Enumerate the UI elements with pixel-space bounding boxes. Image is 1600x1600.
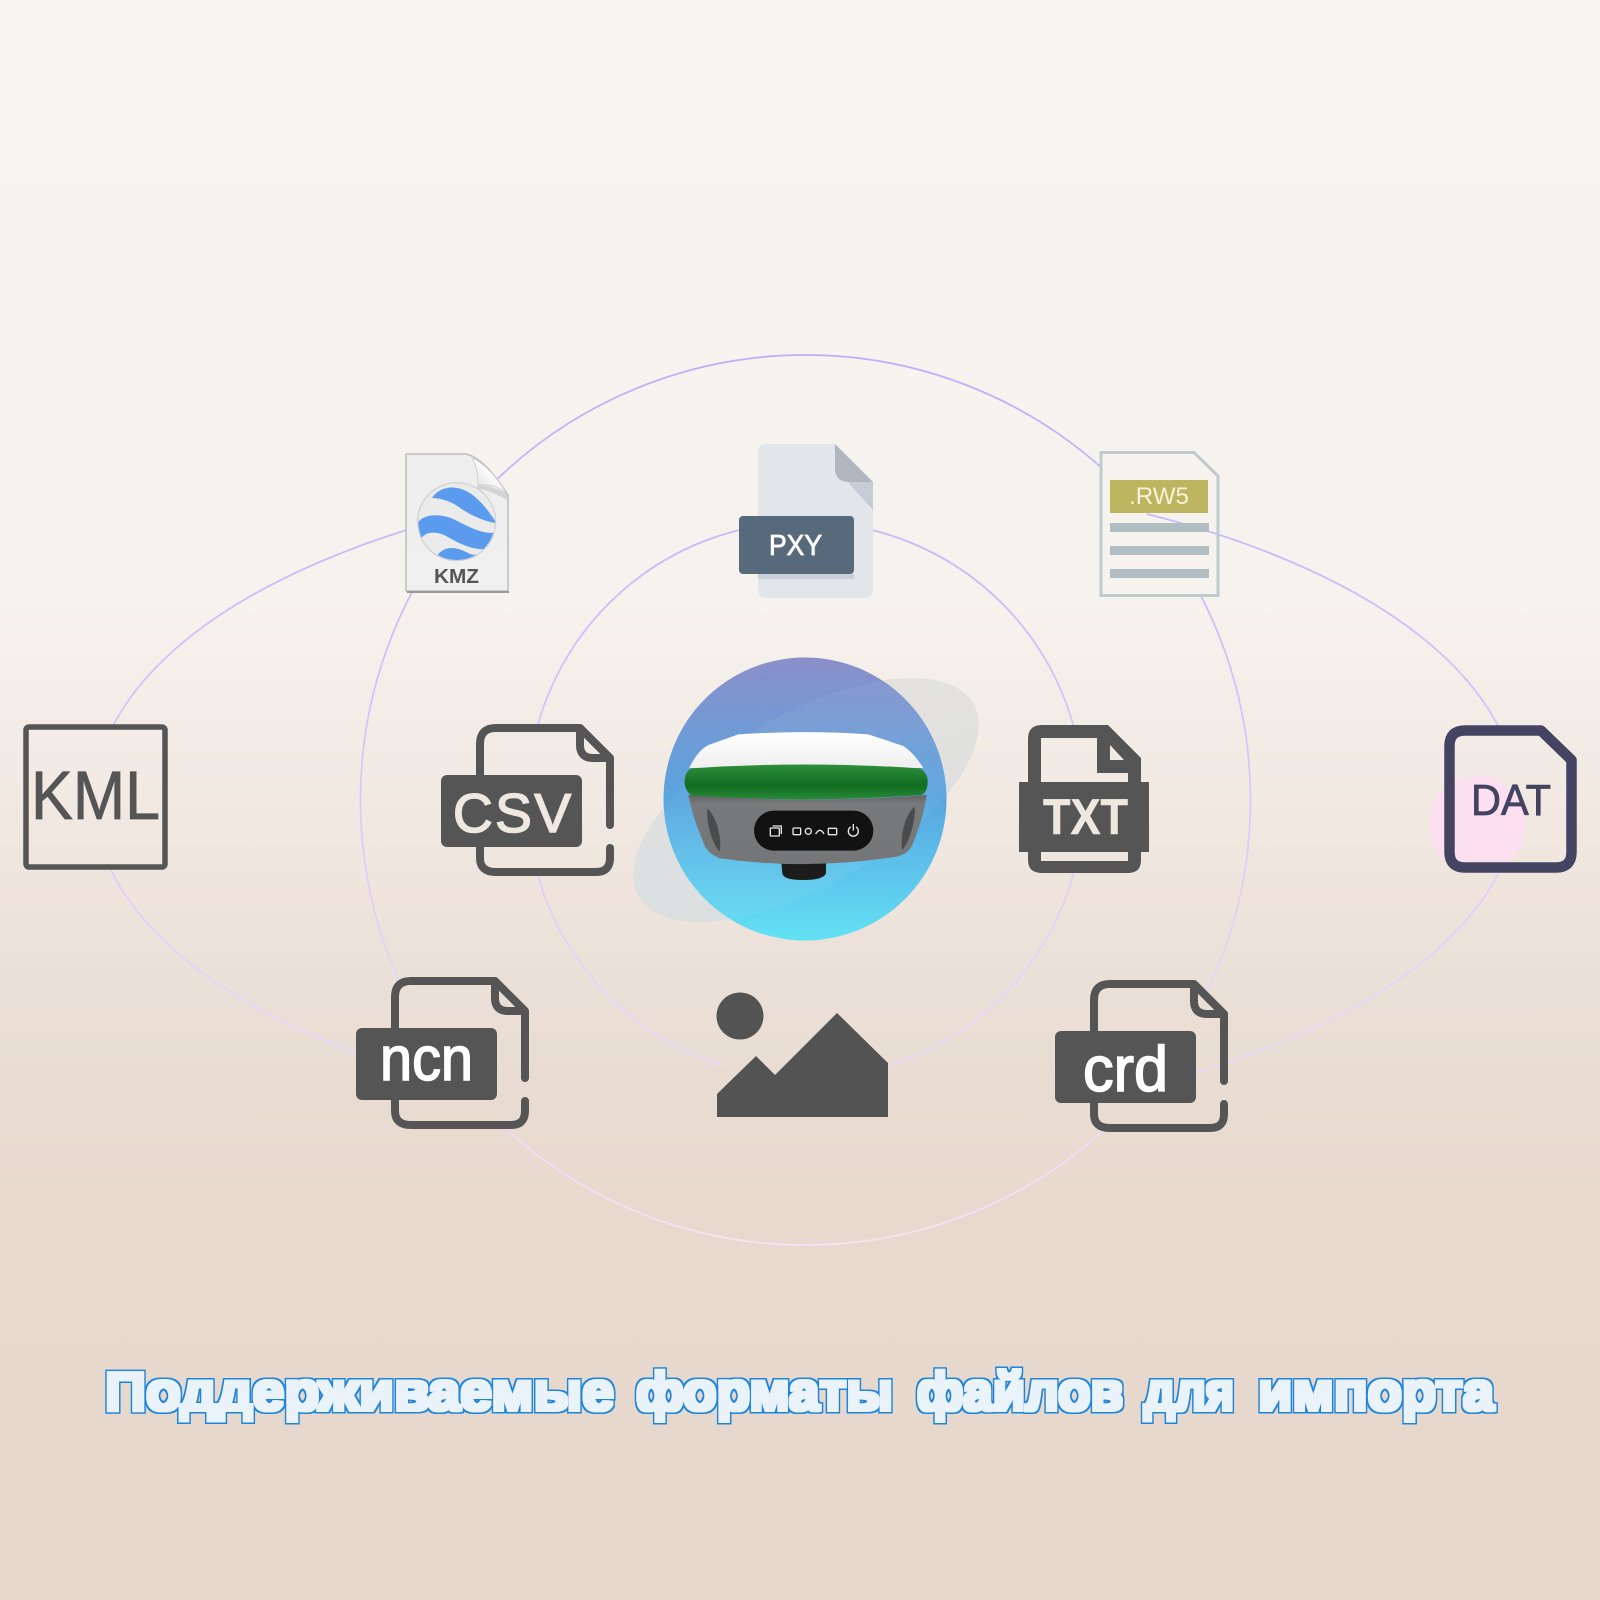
DAT label: DAT <box>1471 776 1551 825</box>
KMZ globe <box>418 483 497 564</box>
icon: crd file <box>1055 980 1228 1132</box>
RW5 label: .RW5 <box>1129 483 1189 510</box>
grey backdrop blob <box>596 629 1016 971</box>
title: форматы <box>636 1362 893 1422</box>
blue gradient disc <box>664 658 946 940</box>
icon: CSV file <box>441 728 610 872</box>
CSV label: CSV <box>453 782 571 844</box>
ncn label: ncn <box>380 1025 473 1094</box>
title: Поддерживаемые <box>105 1362 614 1422</box>
icon: KML file <box>26 727 165 867</box>
title: файлов <box>917 1362 1123 1422</box>
icon: image file <box>716 992 888 1117</box>
orbit rings <box>94 355 1516 1245</box>
icon: TXT file <box>1019 725 1149 873</box>
title: импорта <box>1258 1362 1495 1422</box>
TXT label: TXT <box>1043 789 1128 845</box>
GNSS receiver <box>685 732 928 880</box>
icon: PXY file <box>739 444 873 598</box>
crd label: crd <box>1083 1033 1168 1105</box>
KMZ label: KMZ <box>434 566 479 588</box>
KML label: KML <box>31 757 160 834</box>
icon: DAT file <box>1429 730 1572 872</box>
title <box>105 1362 1495 1422</box>
icon: ncn file <box>356 981 525 1125</box>
title: для <box>1144 1362 1234 1422</box>
PXY label: PXY <box>769 530 822 562</box>
icon: RW5 file <box>1100 451 1220 597</box>
central receiver illustration <box>634 658 978 940</box>
disc highlight band <box>596 629 1016 971</box>
icon: KMZ file <box>406 454 509 593</box>
